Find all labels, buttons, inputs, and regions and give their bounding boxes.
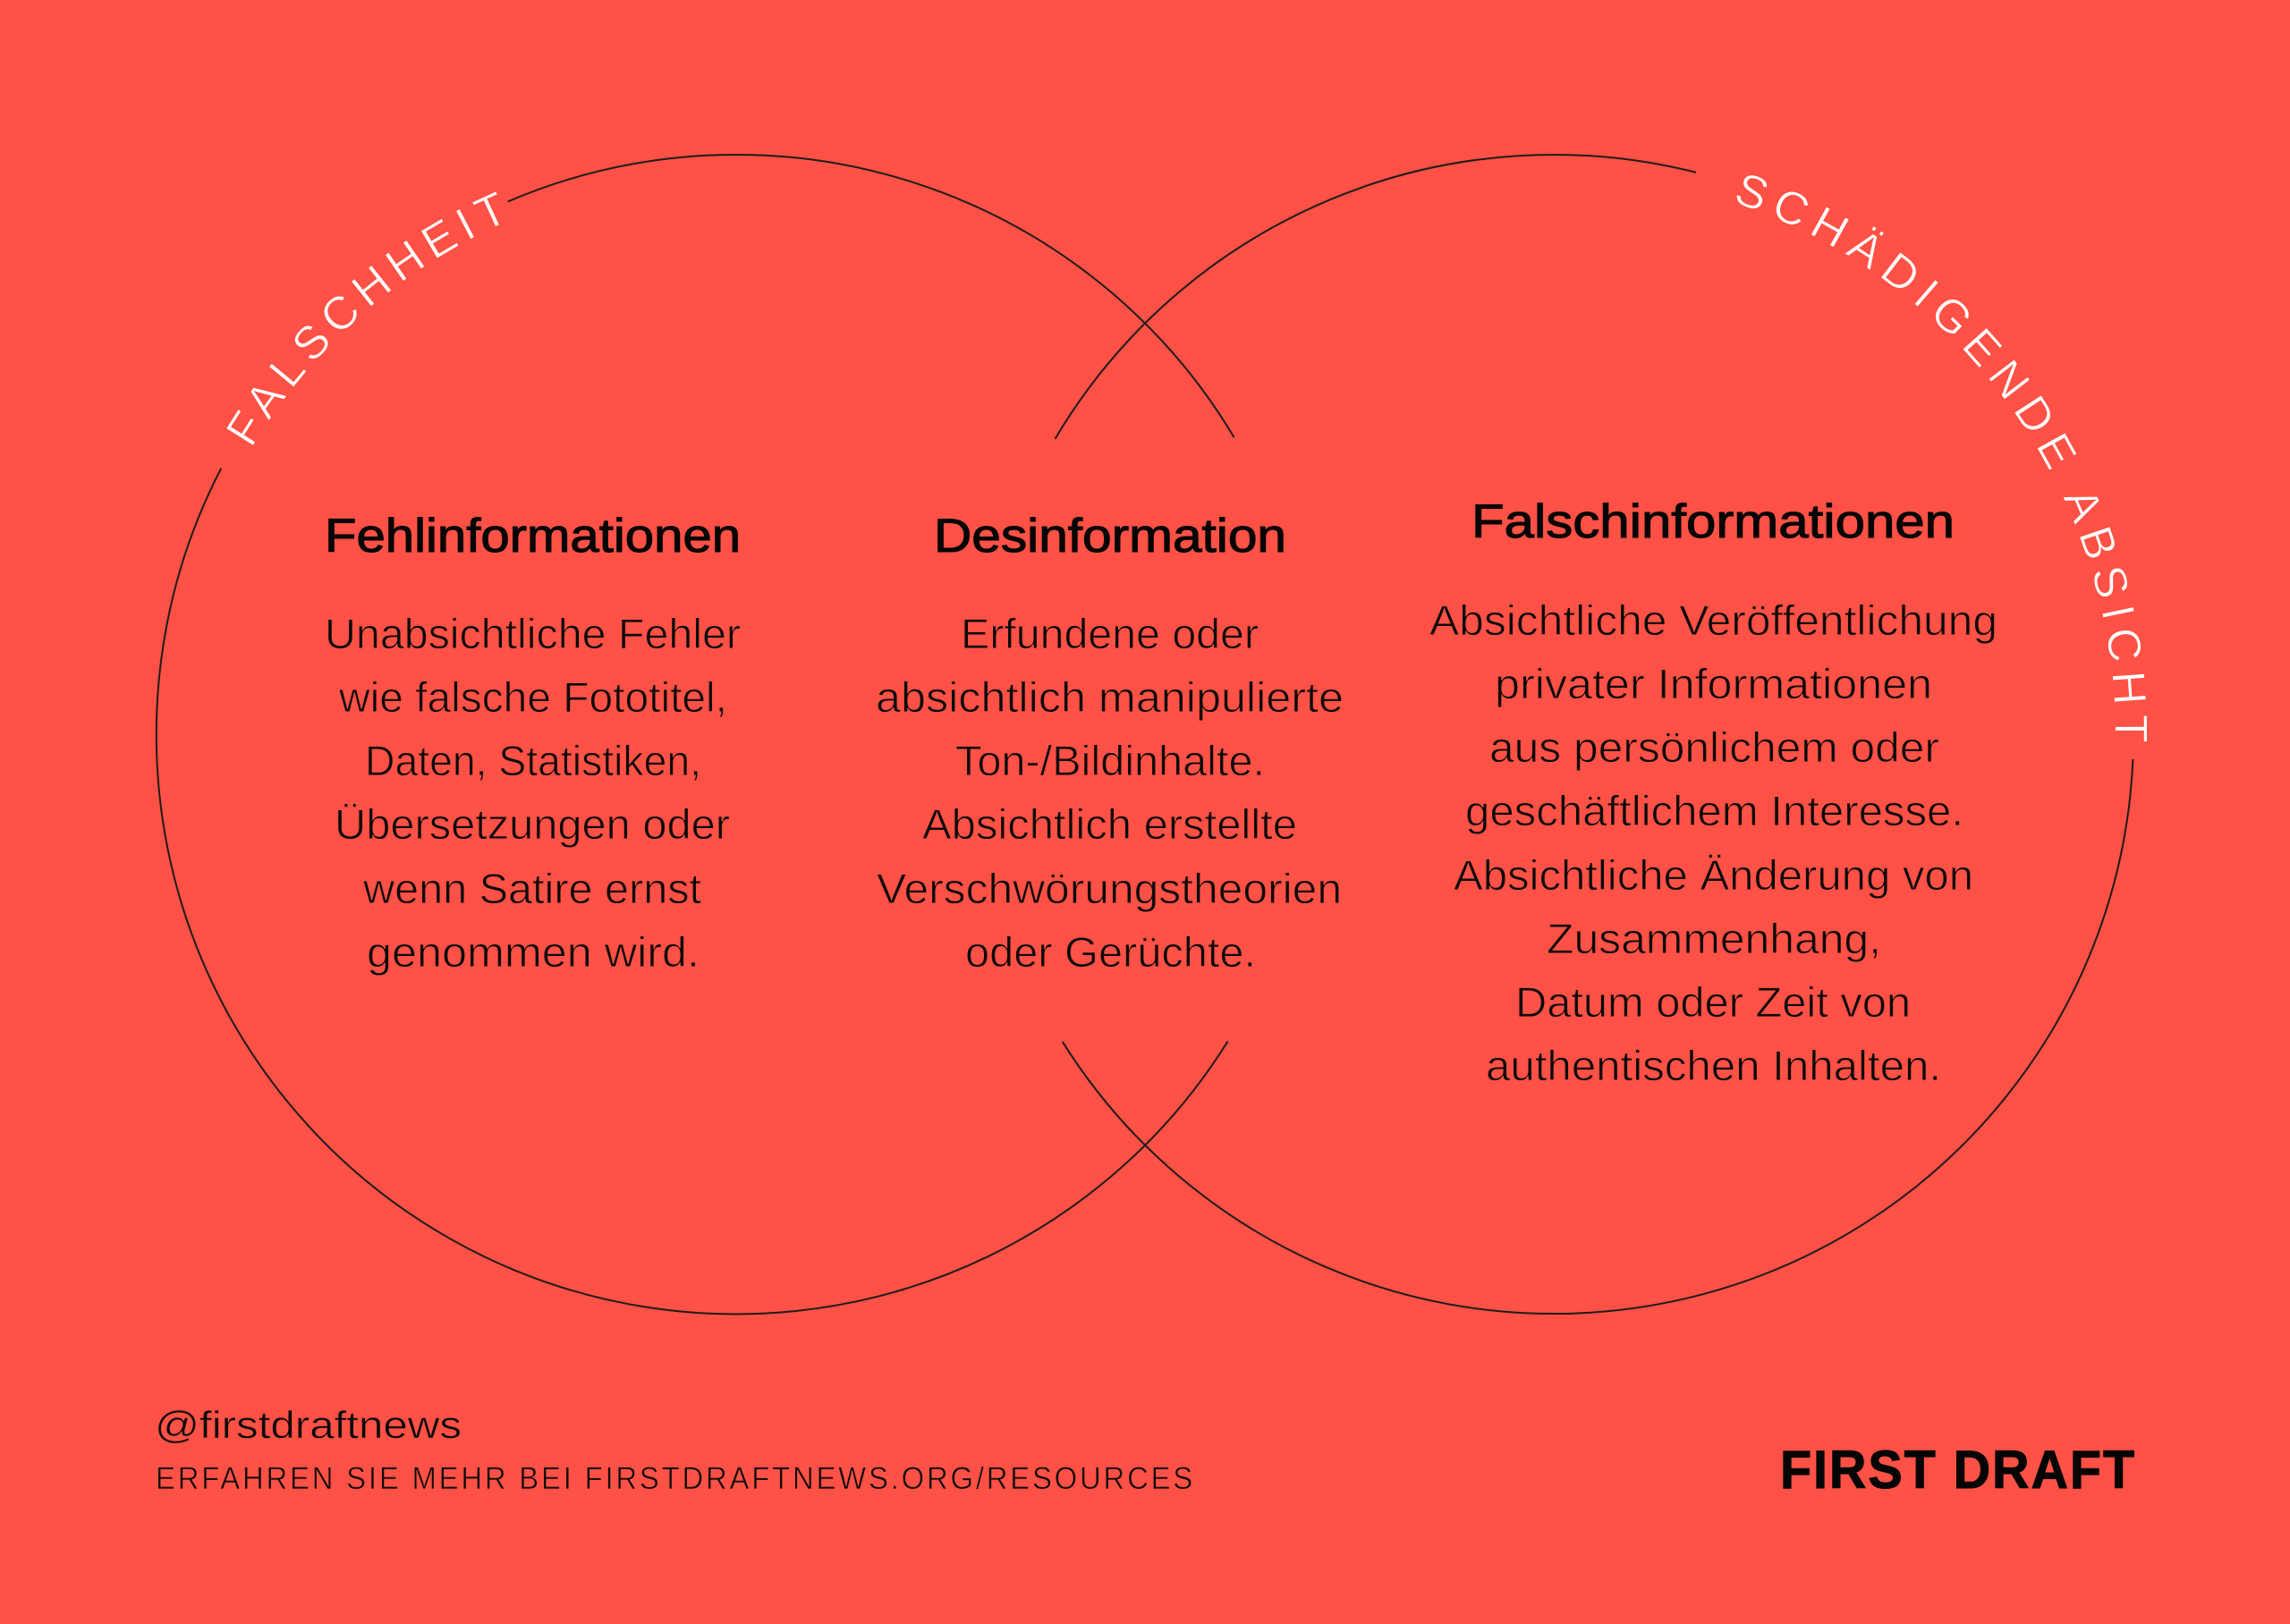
curved label: Schädigende Absicht: SCHÄDIGENDE ABSICHT	[1737, 175, 2147, 742]
text block: Falschinformationen description: Absichtliche Änderung von	[1454, 851, 1973, 899]
heading: Desinformation: Desinformation	[934, 510, 1286, 562]
text block: Falschinformationen description: privater Informationen	[1495, 660, 1932, 707]
text block: Falschinformationen description: aus persönlichem oder	[1489, 723, 1939, 771]
text block: Falschinformationen description: geschäftlichem Interesse.	[1465, 787, 1963, 834]
text block: Fehlinformationen description: wie falsche Fototitel,	[338, 673, 727, 721]
text block: Falschinformationen description: Datum oder Zeit von	[1515, 978, 1911, 1026]
text block: Falschinformationen description: Absichtliche Veröffentlichung	[1429, 596, 1997, 644]
left circle: Falschheit	[157, 155, 1234, 1314]
text block: Desinformation description: Verschwörungstheorien	[877, 865, 1342, 912]
text block: Fehlinformationen description: Unabsichtliche Fehler	[325, 610, 741, 657]
curved label: Falschheit: FALSCHHEIT	[226, 191, 499, 445]
panel: Falschinformationen	[1429, 495, 1997, 1089]
text block: Fehlinformationen description: Daten, Statistiken,	[365, 737, 701, 784]
text block: Desinformation description: Absichtlich erstellte	[922, 800, 1297, 848]
heading: Fehlinformationen: Fehlinformationen	[325, 510, 741, 562]
text block: Fehlinformationen description: Übersetzungen oder	[335, 800, 730, 848]
text block: Fehlinformationen description: wenn Satire ernst	[362, 865, 701, 912]
panel: Desinformation	[876, 510, 1344, 976]
text block: Desinformation description: Erfundene oder	[961, 610, 1259, 657]
right circle: schädigende Absicht	[1056, 155, 2133, 1314]
text block: Falschinformationen description	[1429, 596, 1997, 1089]
heading: Falschinformationen: Falschinformationen	[1472, 495, 1955, 548]
social handle: @firstdraftnews	[155, 1404, 462, 1447]
panel: Fehlinformationen	[325, 510, 741, 976]
logo: First Draft: FIRST DRAFT	[1780, 1440, 2136, 1500]
footer link text: ERFAHREN SIE MEHR BEI FIRSTDRAFTNEWS.ORG/RESOURCES	[156, 1461, 1195, 1496]
text block: Fehlinformationen description	[325, 610, 741, 976]
text block: Desinformation description	[876, 610, 1344, 976]
text block: Falschinformationen description: authentischen Inhalten.	[1486, 1042, 1941, 1089]
text block: Fehlinformationen description: genommen wird.	[367, 928, 700, 976]
text block: Desinformation description: Ton-/Bildinhalte.	[955, 737, 1265, 784]
text block: Falschinformationen description: Zusammenhang,	[1547, 915, 1881, 962]
text block: Desinformation description: absichtlich manipulierte	[876, 673, 1344, 721]
text block: Desinformation description: oder Gerüchte.	[965, 928, 1256, 976]
